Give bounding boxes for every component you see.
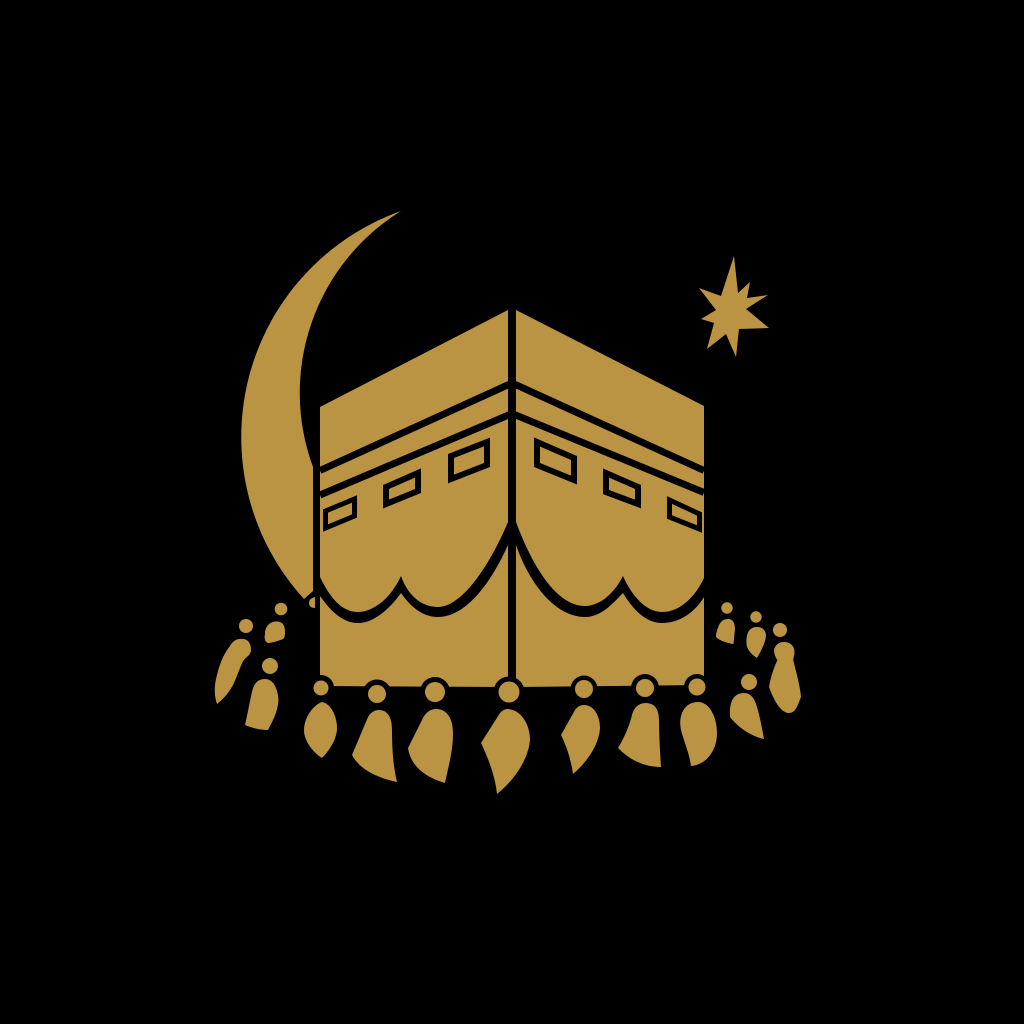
Kiswah belt lines (320, 383, 704, 495)
icon: crescent moon (241, 211, 401, 599)
left pilgrim group (215, 597, 315, 730)
icon: Kaaba (320, 308, 704, 688)
pilgrims (215, 597, 801, 794)
Kaaba right face (516, 310, 704, 687)
base beads with black rings (308, 674, 710, 708)
belt windows (326, 442, 700, 529)
icon: star (699, 256, 769, 357)
front pilgrim bodies (304, 702, 717, 794)
left curtain edge (320, 522, 512, 623)
right curtain edge (512, 522, 704, 623)
right pilgrim group (716, 602, 801, 739)
curtain scallops (320, 522, 704, 623)
Kaaba left face (320, 310, 508, 687)
centre seam (508, 308, 516, 688)
